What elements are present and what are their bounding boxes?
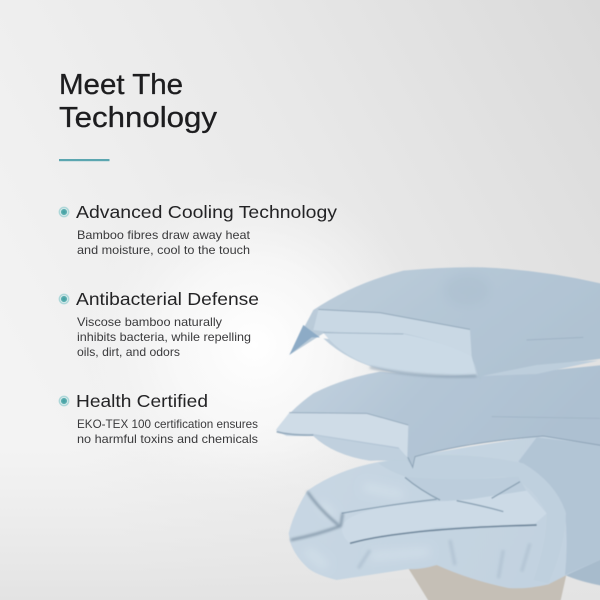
back duvet flap [565,558,600,586]
pocket [313,435,408,461]
soft highlights [307,487,430,567]
lower pillow [276,365,600,467]
top fold [378,455,566,583]
pocket [323,332,476,376]
feature description: inhibits bacteria, while repelling [77,330,251,344]
inner fold [405,477,533,503]
bullet icon [58,294,70,304]
feature heading: Advanced Cooling Technology [76,202,337,222]
bedding stack photo illustration [276,267,600,600]
top pillow [289,267,600,383]
stone stand [408,563,567,600]
feature description [77,228,251,257]
title accent line [59,159,110,161]
title [59,69,218,134]
bullet icon [58,396,70,406]
feature: health certified [58,391,258,446]
flap [313,310,472,356]
right sheet [518,437,600,575]
feature heading: Health Certified [76,391,208,411]
feature description: no harmful toxins and chemicals [77,432,258,446]
feature description [77,417,258,446]
feature description: and moisture, cool to the touch [77,243,250,257]
inner corner [289,325,320,355]
feature description [77,315,251,359]
feature description: Viscose bamboo naturally [77,315,222,329]
feature description: Bamboo fibres draw away heat [77,228,251,242]
feature: advanced cooling [58,202,337,257]
title: Technology [59,102,218,134]
bullet icon [58,206,70,218]
feature: antibacterial [58,289,259,359]
roll [342,491,547,543]
feature heading: Antibacterial Defense [76,289,259,309]
fold shadows [350,525,537,543]
title: Meet The [59,69,183,101]
feature description: EKO-TEX 100 certification ensures [77,417,258,431]
folded duvet [289,435,600,588]
flap [276,413,408,457]
feature description: oils, dirt, and odors [77,345,180,359]
